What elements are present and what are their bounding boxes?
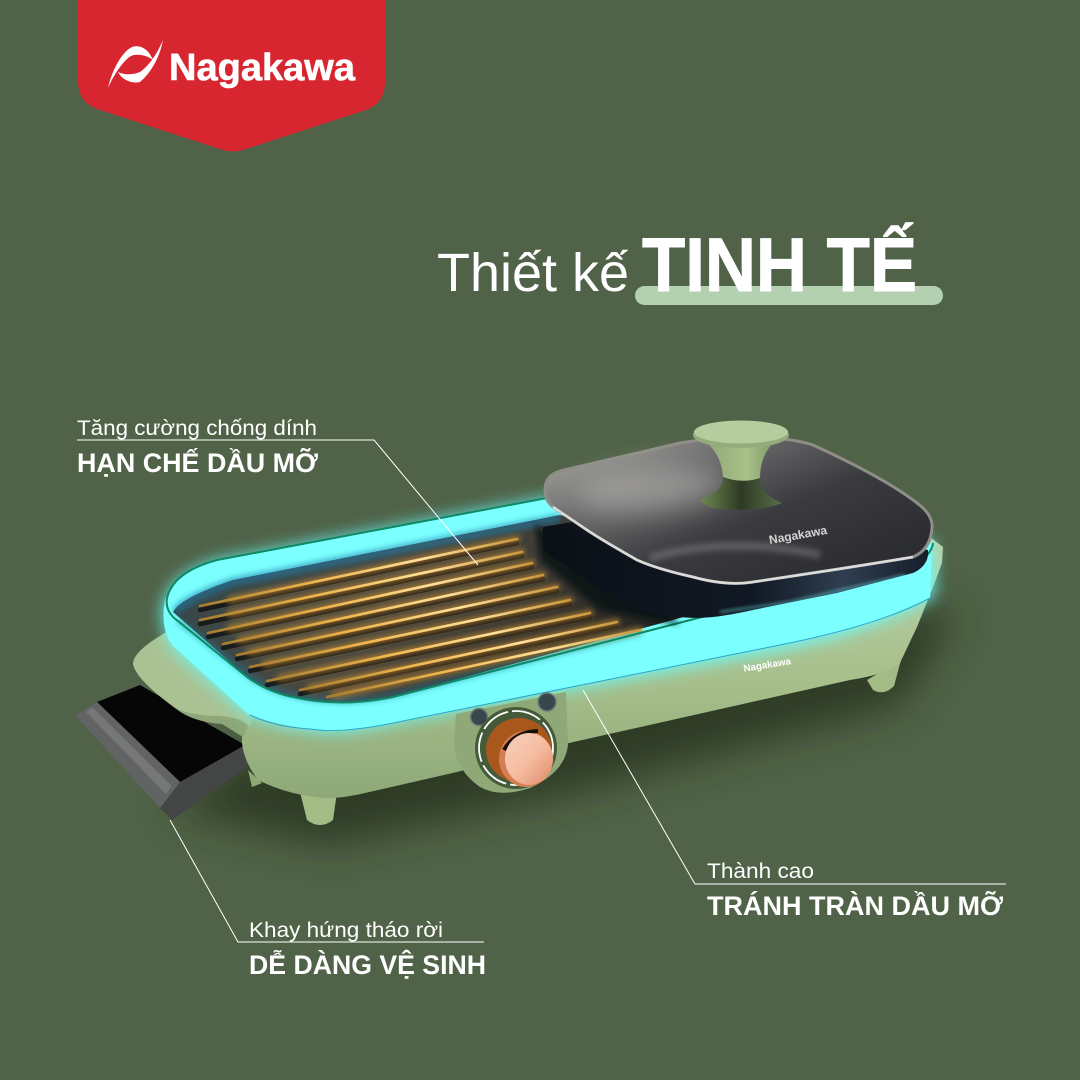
ground shadow	[170, 610, 960, 845]
appliance body	[242, 537, 943, 798]
feet	[248, 660, 901, 825]
dial scale ring	[475, 707, 557, 789]
green rim line	[167, 498, 933, 702]
lid knob	[693, 420, 789, 510]
callout: Tăng cường chống dính: Tăng cường chống dính	[77, 416, 317, 440]
left handle	[133, 630, 256, 737]
lid rim highlight	[553, 507, 913, 583]
title bold text: TINH TẾ	[642, 223, 917, 308]
header badge with Nagakawa logo	[78, 0, 385, 152]
copper dial	[486, 718, 552, 782]
thin blue line on rim	[250, 598, 930, 731]
callout: Tăng cường chống dính: HẠN CHẾ DẦU MỠ	[77, 447, 318, 478]
callout: Khay hứng tháo rời: DỄ DÀNG VỆ SINH	[249, 949, 486, 980]
leader line	[583, 690, 1006, 884]
title light text: Thiết kế	[437, 243, 629, 303]
drip tray	[75, 685, 247, 820]
title	[437, 223, 943, 308]
leader line	[170, 820, 484, 942]
pot base	[543, 500, 928, 618]
product: grill and hot-pot appliance	[75, 420, 960, 845]
pot glow edge	[720, 575, 905, 612]
callout: Thành cao	[583, 690, 1006, 921]
callout: Thành cao: TRÁNH TRÀN DẦU MỠ	[707, 890, 1003, 921]
callout: Thành cao: Thành cao	[707, 859, 814, 883]
cyan glow rim	[162, 498, 935, 732]
callout: Khay hứng tháo rời	[170, 820, 486, 980]
callout: Tăng cường chống dính	[77, 416, 478, 565]
icon: logo swoosh	[108, 40, 163, 88]
grill ribs	[200, 539, 640, 697]
logo wordmark: Nagakawa	[169, 47, 356, 89]
body logo: Nagakawa	[743, 656, 792, 675]
title underline pill	[635, 286, 943, 305]
pot shadow on grill	[535, 525, 680, 625]
indicator buttons	[470, 708, 488, 726]
control panel	[454, 692, 568, 793]
callout: Khay hứng tháo rời: Khay hứng tháo rời	[249, 918, 443, 942]
glass lid	[545, 437, 932, 583]
lid logo: Nagakawa	[768, 523, 828, 547]
grill plate	[173, 515, 800, 702]
lid glass reflection	[573, 460, 727, 520]
leader line	[77, 440, 478, 565]
